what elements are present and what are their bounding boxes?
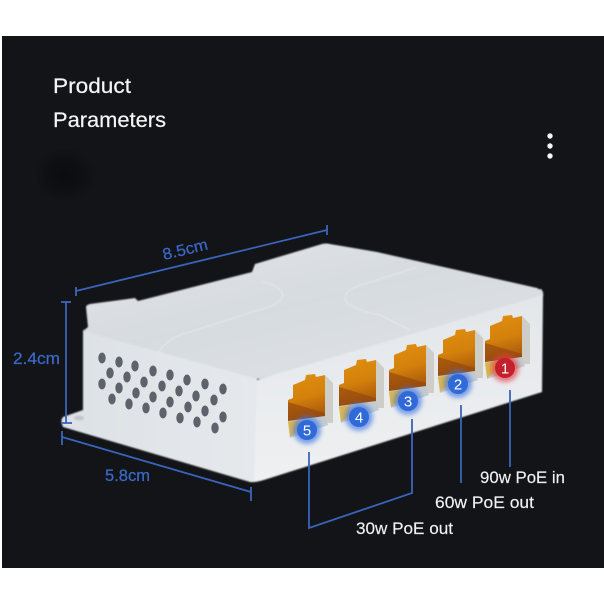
ethernet ports bbox=[288, 315, 530, 438]
callout: 90w PoE in bbox=[480, 390, 565, 487]
port badge 5: 5 bbox=[303, 422, 311, 440]
icon: three dots menu bbox=[547, 133, 553, 159]
top face curves bbox=[157, 267, 417, 357]
callout: 30w PoE out: 30w PoE out bbox=[356, 519, 453, 538]
device top face bbox=[83, 244, 543, 379]
port badge 3: 3 bbox=[404, 394, 412, 410]
port badge 1 bbox=[491, 354, 519, 382]
port badge 1: 1 bbox=[501, 360, 509, 378]
device: PoE switch bbox=[62, 244, 543, 482]
dark smudge bbox=[33, 147, 97, 203]
title bbox=[53, 74, 166, 132]
port badge 5 bbox=[293, 416, 321, 444]
dimension: width 5.8cm: 5.8cm bbox=[105, 467, 150, 485]
port badge 4: 4 bbox=[355, 410, 363, 426]
dimension: height 2.4cm bbox=[13, 302, 72, 423]
dimension: length 8.5cm bbox=[76, 225, 327, 296]
ventilation holes bbox=[98, 352, 227, 434]
callout: 60w PoE out: 60w PoE out bbox=[435, 493, 534, 512]
callout: 90w PoE in: 90w PoE in bbox=[480, 468, 565, 487]
dimension: height 2.4cm: 2.4cm bbox=[13, 350, 60, 368]
port badge 2: 2 bbox=[454, 376, 462, 394]
device body left side bbox=[62, 330, 267, 482]
callout: 60w PoE out bbox=[435, 405, 534, 512]
dimension: width 5.8cm bbox=[62, 431, 251, 501]
port badge 4 bbox=[345, 403, 373, 431]
flange mount hole bbox=[74, 416, 84, 420]
port badge 3 bbox=[394, 387, 422, 415]
title: Parameters bbox=[53, 108, 166, 132]
dimension: length 8.5cm: 8.5cm bbox=[161, 237, 210, 264]
device front face bbox=[254, 289, 543, 481]
title: Product bbox=[53, 74, 131, 98]
port badge 2 bbox=[444, 370, 472, 398]
callout: 30w PoE out bbox=[309, 419, 453, 538]
